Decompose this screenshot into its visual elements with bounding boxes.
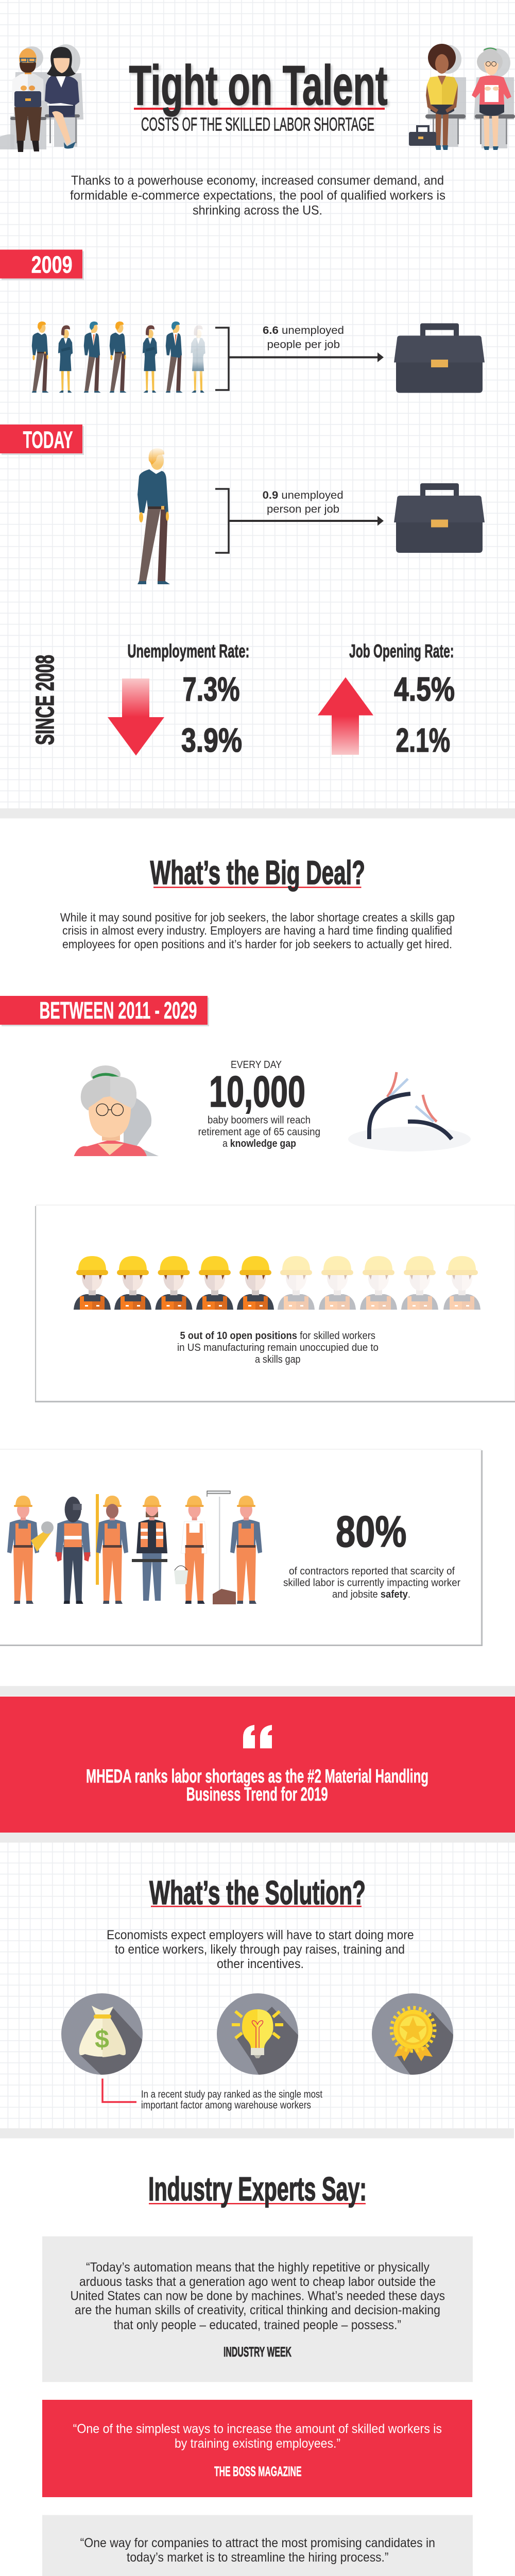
stat: 80%: 80% xyxy=(336,1507,407,1556)
quote panel: industry week: that only people – educated, trained people – possess.” xyxy=(114,2318,401,2332)
icon: money bag xyxy=(61,1993,143,2075)
panel caption: a skills gap xyxy=(255,1354,301,1365)
big deal paragraph: crisis in almost every industry. Employers are having a hard time finding qualified xyxy=(62,924,452,937)
icon: briefcase 2009 xyxy=(394,324,485,393)
quote panel: industry week: are the human skills of creativity, critical thinking and decision-making xyxy=(75,2303,440,2317)
quote panel: logistics management xyxy=(42,2515,473,2576)
heading: what's the big deal: What’s the Big Deal? xyxy=(150,854,365,891)
icon: older woman xyxy=(74,1065,159,1156)
divider band xyxy=(0,1686,515,1696)
quote panel: industry week: United States can now be done by machines. What’s needed these days xyxy=(70,2289,445,2303)
heading: industry experts say: Industry Experts Say: xyxy=(148,2170,367,2208)
label: 0.9 unemployed person per job xyxy=(263,489,344,515)
tag: today xyxy=(0,425,84,455)
icon: light bulb xyxy=(217,1993,298,2075)
quote text xyxy=(86,1766,428,1805)
intro paragraph xyxy=(70,174,445,218)
label: 6.6 unemployed people per job: 6.6 unemployed xyxy=(263,324,344,336)
stat: 80%: of contractors reported that scarcity of xyxy=(289,1566,455,1577)
divider band xyxy=(0,808,515,818)
panel caption: in US manufacturing remain unoccupied due to xyxy=(177,1342,379,1353)
job opening rate stat: 2.1% xyxy=(396,721,450,759)
row of job seekers 2009 xyxy=(32,321,205,393)
background grid: top section xyxy=(0,0,515,808)
quote panel: the boss magazine: THE BOSS MAGAZINE xyxy=(214,2464,302,2479)
header group xyxy=(0,44,515,152)
since 2008 label: SINCE 2008 xyxy=(31,655,59,745)
panel: MHEDA quote xyxy=(0,1697,515,1833)
stat: 80% xyxy=(283,1507,460,1600)
stat: 80%: skilled labor is currently impacting worker xyxy=(283,1577,460,1588)
label: 0.9 unemployed person per job: person per job xyxy=(267,503,339,515)
panel caption: 5 out of 10 open positions for skilled workers xyxy=(180,1330,375,1342)
unemployment rate stat: Unemployment Rate: xyxy=(127,640,249,662)
callout: pay study note: In a recent study pay ranked as the single most xyxy=(141,2089,322,2100)
icon: money bag: $ xyxy=(95,2025,109,2054)
divider band xyxy=(0,2128,514,2138)
unemployment rate stat: 7.3% xyxy=(183,670,240,708)
illustration: six tradespeople xyxy=(7,1491,262,1604)
quote panel: industry week: INDUSTRY WEEK xyxy=(224,2344,291,2360)
title xyxy=(129,54,387,117)
stat: every day 10,000 xyxy=(198,1059,320,1149)
quote text: Business Trend for 2019 xyxy=(186,1784,328,1805)
unemployment rate stat xyxy=(108,640,249,759)
tag: today: TODAY xyxy=(23,427,73,453)
icon: briefcase today xyxy=(394,483,485,553)
big deal paragraph xyxy=(60,910,455,951)
job opening rate stat: 4.5% xyxy=(394,670,455,708)
panel: 80% of contractors xyxy=(0,1449,483,1646)
quote panel: industry week xyxy=(42,2236,473,2382)
row of ten workers xyxy=(74,1256,480,1310)
quote panel: industry week: “Today’s automation means that the highly repetitive or physically xyxy=(86,2260,430,2275)
label: 6.6 unemployed people per job: people per job xyxy=(267,338,340,350)
icon: severed cable xyxy=(348,1072,471,1151)
stat: every day 10,000: EVERY DAY xyxy=(231,1059,282,1071)
job opening rate stat xyxy=(318,640,455,759)
job opening rate stat: Job Opening Rate: xyxy=(349,640,454,662)
arrow: up xyxy=(318,677,373,755)
tag: 2009: 2009 xyxy=(31,251,73,278)
stat: every day 10,000: baby boomers will reach xyxy=(208,1115,311,1126)
panel caption xyxy=(177,1330,379,1365)
callout: pay study note: important factor among warehouse workers xyxy=(141,2100,311,2111)
arrow: down xyxy=(108,679,164,755)
stat: every day 10,000: retirement age of 65 causing xyxy=(198,1127,320,1138)
quote panel: logistics management: “One way for companies to attract the most promising candidates in xyxy=(80,2536,435,2550)
label: 0.9 unemployed person per job: 0.9 unemployed xyxy=(263,489,344,501)
quote panel: logistics management: today’s market is to streamline the hiring process.” xyxy=(127,2550,388,2565)
bracket and arrow 2009 xyxy=(215,328,384,390)
title underline xyxy=(134,108,385,110)
quote panel: the boss magazine: “One of the simplest ways to increase the amount of skilled workers is xyxy=(73,2421,442,2436)
intro paragraph: shrinking across the US. xyxy=(193,204,322,218)
icon: quotation mark xyxy=(243,1725,272,1749)
stat: 80%: and jobsite safety. xyxy=(332,1589,410,1600)
panel: 5 out of 10 open positions xyxy=(35,1205,515,1402)
callout: pay study note xyxy=(102,2078,322,2111)
quote panel: the boss magazine xyxy=(42,2400,472,2497)
intro paragraph: formidable e-commerce expectations, the pool of qualified workers is xyxy=(70,188,445,202)
solution paragraph: other incentives. xyxy=(217,1957,304,1971)
big deal paragraph: employees for open positions and it’s harder for job seekers to actually get hired. xyxy=(62,938,452,951)
label: 6.6 unemployed people per job xyxy=(263,324,344,350)
job seeker today xyxy=(138,448,170,584)
icon: award badge xyxy=(372,1993,453,2075)
icon: seated man and woman xyxy=(0,44,83,152)
stat: every day 10,000: 10,000 xyxy=(209,1067,305,1116)
quote panel: industry week: arduous tasks that a generation ago went to cheap labor outside the xyxy=(79,2275,436,2289)
solution paragraph: Economists expect employers will have to start doing more xyxy=(107,1928,414,1942)
quote panel: the boss magazine: by training existing employees.” xyxy=(175,2436,340,2451)
icon: seated women xyxy=(409,44,515,150)
heading: what's the solution: What’s the Solution? xyxy=(149,1874,366,1911)
intro paragraph: Thanks to a powerhouse economy, increased consumer demand, and xyxy=(71,174,444,188)
bracket and arrow today xyxy=(215,489,384,553)
solution paragraph xyxy=(107,1928,414,1971)
solution paragraph: to entice workers, likely through pay raises, training and xyxy=(115,1942,405,1957)
big deal paragraph: While it may sound positive for job seekers, the labor shortage creates a skills gap xyxy=(60,910,455,924)
tag: 2009 xyxy=(0,249,84,280)
tag: between 2011 - 2029 xyxy=(0,996,209,1026)
divider band xyxy=(0,1833,515,1842)
tag: between 2011 - 2029: BETWEEN 2011 - 2029 xyxy=(39,997,197,1024)
unemployment rate stat: 3.9% xyxy=(181,721,242,759)
background grid: solution section xyxy=(0,1842,515,2128)
stat: every day 10,000: a knowledge gap xyxy=(222,1138,296,1149)
title: Tight on Talent xyxy=(129,54,387,117)
